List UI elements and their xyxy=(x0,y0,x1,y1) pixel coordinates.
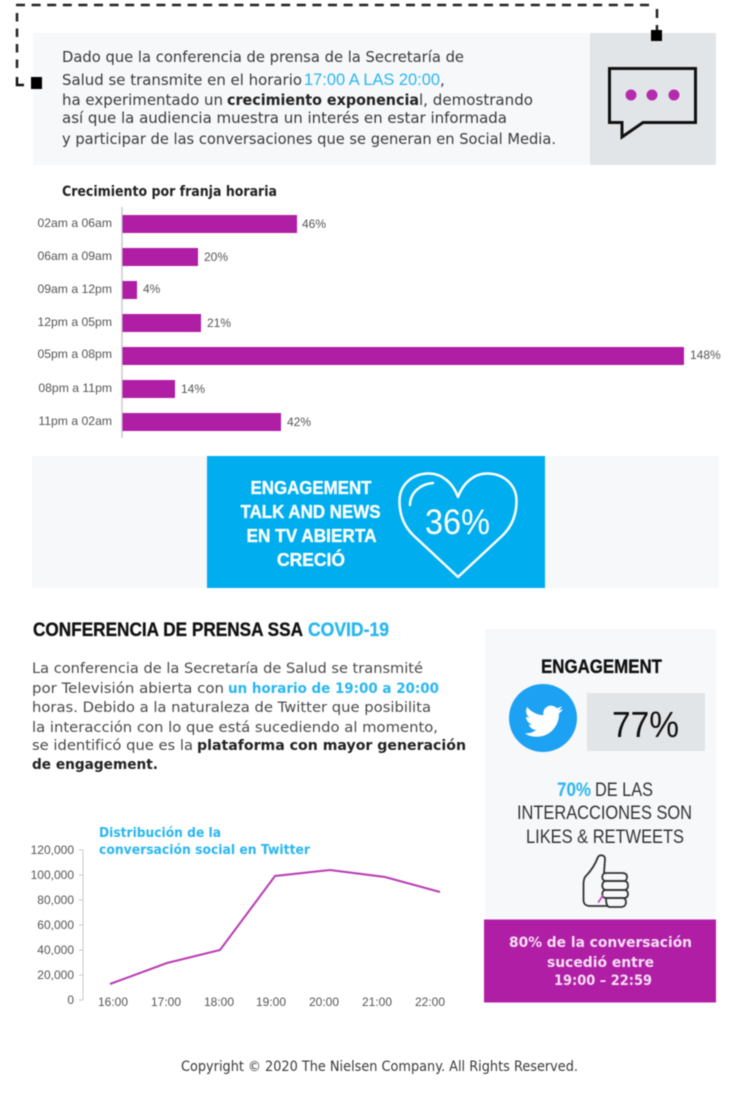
body text: plataforma con mayor generación xyxy=(197,738,466,754)
intro text: crecimiento exponencia xyxy=(227,91,419,109)
bar chart: crecimiento por franja horaria: 148% xyxy=(690,348,721,362)
stat: 77%: 77% xyxy=(612,704,679,745)
panel: engagement twitter xyxy=(485,629,716,920)
bar chart: crecimiento por franja horaria: 20% xyxy=(204,250,228,264)
intro text: y participar de las conversaciones que se generan en Social Media. xyxy=(62,130,556,148)
likes and retweets text: INTERACCIONES SON xyxy=(517,803,692,824)
line chart: distribución en Twitter: 18:00 xyxy=(204,995,234,1009)
panel: engagement banner xyxy=(32,456,719,588)
likes and retweets text xyxy=(517,780,692,848)
line chart: distribución en Twitter: 21:00 xyxy=(362,995,392,1009)
dashed connector xyxy=(16,5,662,89)
bar chart: crecimiento por franja horaria: 11pm a 02am xyxy=(38,414,112,428)
intro text: 17:00 A LAS 20:00 xyxy=(304,70,440,89)
banner text xyxy=(240,477,380,570)
line chart: distribución en Twitter: 20:00 xyxy=(309,995,339,1009)
chart title xyxy=(99,825,310,858)
bar chart: crecimiento por franja horaria: 05pm a 08pm xyxy=(37,347,112,361)
banner text: ENGAGEMENT xyxy=(250,477,372,498)
panel heading: ENGAGEMENT xyxy=(541,657,662,678)
bar chart: crecimiento por franja horaria: 14% xyxy=(181,382,205,396)
icon: heart with 36% xyxy=(400,474,516,577)
intro text: , xyxy=(440,71,445,89)
intro text: l, demostrando xyxy=(419,91,533,109)
chart title: Crecimiento por franja horaria xyxy=(62,184,277,200)
line chart: distribución en Twitter xyxy=(31,825,445,1009)
bar chart: crecimiento por franja horaria: 46% xyxy=(302,217,326,231)
section heading: COVID-19 xyxy=(308,620,389,641)
callout: 80% de la conversación: 19:00 – 22:59 xyxy=(554,973,652,989)
intro text: Dado que la conferencia de prensa de la Secretaría de xyxy=(62,48,464,66)
line chart: distribución en Twitter: 16:00 xyxy=(98,995,128,1009)
line chart: distribución en Twitter: 20,000 xyxy=(37,968,74,982)
likes and retweets text: LIKES & RETWEETS xyxy=(526,827,684,848)
body text: horas. Debido a la naturaleza de Twitter que posibilita xyxy=(32,700,431,716)
banner text: EN TV ABIERTA xyxy=(246,525,376,546)
line chart: distribución en Twitter: 80,000 xyxy=(37,893,74,907)
callout: 80% de la conversación: 80% de la conversación xyxy=(509,935,692,951)
bar chart: crecimiento por franja horaria: 06am a 09am xyxy=(37,249,112,263)
section heading: CONFERENCIA DE PRENSA SSA xyxy=(33,620,303,641)
body text: de engagement. xyxy=(32,757,158,773)
likes and retweets text: DE LAS xyxy=(595,780,653,801)
banner text: TALK AND NEWS xyxy=(240,501,380,522)
intro text xyxy=(62,48,556,148)
line chart: distribución en Twitter: 40,000 xyxy=(37,943,74,957)
icon: thumbs up xyxy=(584,855,628,907)
footer copyright: Copyright © 2020 The Nielsen Company. All Rights Reserved. xyxy=(181,1059,578,1075)
line chart: distribución en Twitter: 100,000 xyxy=(31,868,74,882)
bar chart: crecimiento por franja horaria: 21% xyxy=(207,316,231,330)
bar chart: crecimiento por franja horaria: 08pm a 11pm xyxy=(38,381,112,395)
callout: 80% de la conversación xyxy=(484,920,716,1002)
panel: intro xyxy=(16,5,716,165)
likes and retweets text: 70% xyxy=(557,780,591,801)
line chart: distribución en Twitter: 120,000 xyxy=(31,843,74,857)
chart title: conversación social en Twitter xyxy=(99,842,310,858)
callout: 80% de la conversación: sucedió entre xyxy=(547,955,654,971)
stat: 77% xyxy=(587,693,705,751)
body text: por Televisión abierta con xyxy=(32,681,224,697)
banner text: CRECIÓ xyxy=(277,549,345,570)
icon: speech bubble xyxy=(610,68,696,137)
body text: La conferencia de la Secretaría de Salud se transmité xyxy=(32,661,423,677)
icon: heart with 36%: 36% xyxy=(425,503,490,542)
line chart: distribución en Twitter: 17:00 xyxy=(151,995,181,1009)
body text xyxy=(32,661,466,773)
body text: se identificó que es la xyxy=(32,738,193,754)
chart title: Distribución de la xyxy=(99,825,221,841)
line chart: distribución en Twitter: 22:00 xyxy=(415,995,445,1009)
icon: twitter xyxy=(509,684,577,752)
line chart: distribución en Twitter: 19:00 xyxy=(256,995,286,1009)
body text: la interacción con lo que está sucediendo al momento, xyxy=(32,720,438,736)
bar chart: crecimiento por franja horaria: 4% xyxy=(143,282,161,296)
bar chart: crecimiento por franja horaria: 12pm a 05pm xyxy=(37,315,112,329)
line chart: distribución en Twitter: 60,000 xyxy=(37,918,74,932)
bar chart: crecimiento por franja horaria: 42% xyxy=(287,415,311,429)
intro text: así que la audiencia muestra un interés en estar informada xyxy=(62,109,507,127)
body text: un horario de 19:00 a 20:00 xyxy=(228,681,439,697)
intro text: ha experimentado un xyxy=(62,91,223,109)
line chart: distribución en Twitter: 0 xyxy=(67,993,74,1007)
bar chart: crecimiento por franja horaria: 09am a 12pm xyxy=(37,282,112,296)
intro text: Salud se transmite en el horario xyxy=(62,71,302,89)
bar chart: crecimiento por franja horaria: 02am a 06am xyxy=(37,216,112,230)
bar chart: crecimiento por franja horaria xyxy=(37,184,721,438)
